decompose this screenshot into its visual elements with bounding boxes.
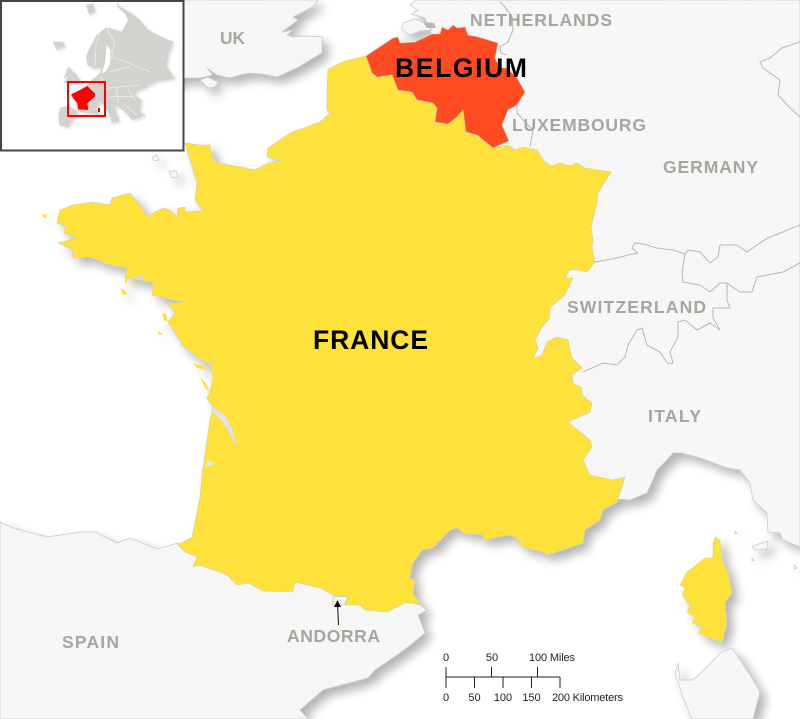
scale labels: miles: 0: [443, 652, 449, 664]
label: Italy: ITALY: [648, 406, 701, 426]
inset: locator rectangle: [68, 82, 105, 116]
land: Tuscan islands: [735, 531, 797, 569]
scale labels: miles: 100 Miles: [529, 652, 576, 664]
land: Isle of Wight: [200, 77, 218, 88]
land: Spain: [0, 522, 427, 719]
scale labels: kilometers: 50: [468, 692, 481, 704]
country: Belgium: [366, 25, 525, 148]
scale labels: kilometers: 0: [443, 692, 449, 704]
land: continental Europe: [410, 0, 800, 547]
land borders: [500, 2, 800, 372]
basin: Arcachon: [205, 460, 215, 467]
gulf of Morbihan and Charente inlet: [136, 275, 213, 366]
land: Channel Islands: [152, 155, 178, 178]
inset: France in red: [71, 86, 95, 110]
inset: sea gap Baltic: [102, 45, 111, 73]
label: France: FRANCE: [313, 325, 428, 355]
label: Switzerland: SWITZERLAND: [567, 297, 706, 317]
microstate: Andorra: [333, 596, 348, 607]
scale labels: kilometers: 200 Kilometers: [552, 692, 624, 704]
island: Corsica: [680, 537, 732, 643]
islands: French Atlantic: [42, 214, 210, 392]
label: UK: UK: [220, 28, 245, 48]
Zeeland estuary: [423, 22, 436, 28]
inset: Europe landmass: [53, 1, 175, 127]
scale labels: miles: [443, 652, 576, 664]
scale labels: kilometers: 150: [522, 692, 541, 704]
label: Germany: GERMANY: [663, 157, 758, 177]
scale labels: miles: 50: [486, 652, 498, 664]
estuary: Gironde: [212, 407, 239, 447]
scale labels: kilometers: [443, 692, 624, 704]
label: Andorra: ANDORRA: [287, 626, 380, 646]
label: Netherlands: NETHERLANDS: [470, 10, 612, 30]
label: Belgium: BELGIUM: [395, 53, 527, 83]
arrow: Andorra pointer: [334, 600, 341, 625]
land: Sardinia: [675, 648, 760, 719]
scale labels: kilometers: 100: [494, 692, 512, 704]
land: UK: [0, 0, 322, 90]
inset: internal borders: [95, 28, 150, 115]
label: Spain: SPAIN: [62, 632, 119, 652]
label: Luxembourg: LUXEMBOURG: [512, 115, 646, 135]
land: Zeeland islands: [402, 19, 432, 35]
inset: Corsica in red: [98, 108, 100, 112]
inset frame: [1, 1, 184, 150]
scale bar: [443, 652, 624, 704]
inset locator map: [1, 1, 184, 151]
country: France: [57, 56, 625, 612]
